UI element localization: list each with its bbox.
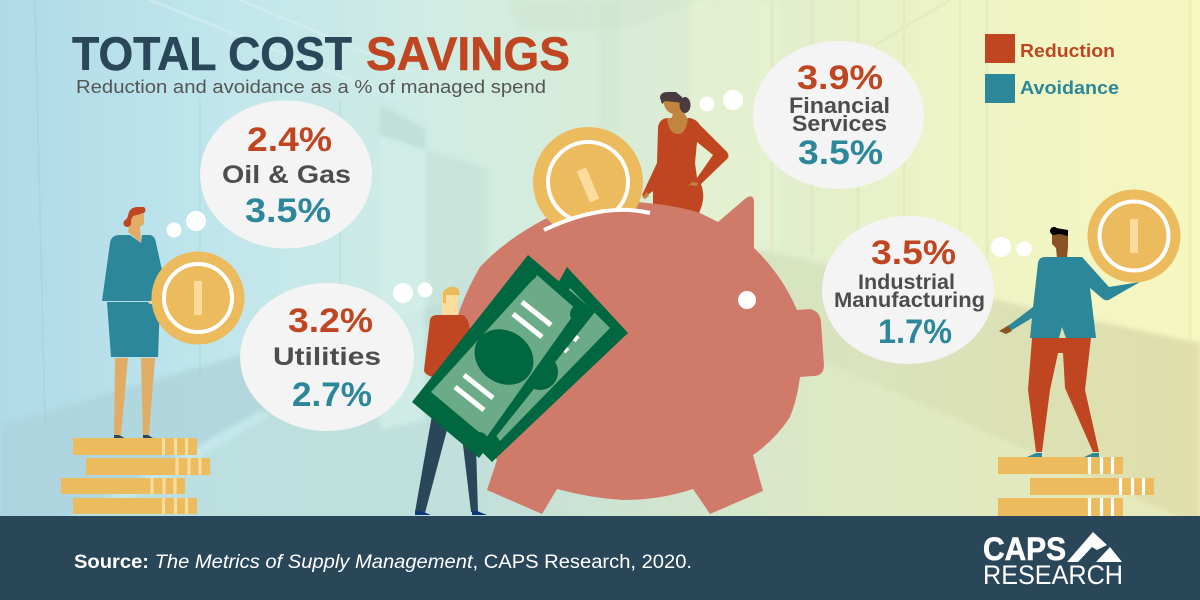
figure: man carrying the bill [415, 287, 487, 515]
figure: woman in red dress [642, 92, 728, 216]
coin held by woman [152, 252, 244, 344]
bubble: Financial Services: 3.9% [797, 59, 883, 97]
piggy bank coin slot [544, 210, 650, 230]
bubble: Utilities: 2.7% [292, 376, 372, 414]
bubble: Industrial Manufacturing: 3.5% [871, 234, 956, 272]
thought dots: woman in teal [166, 211, 206, 238]
coin held by man [1088, 190, 1180, 282]
bubble: Oil & Gas: 3.5% [245, 192, 331, 230]
bubble: Oil & Gas: Oil & Gas [222, 161, 351, 189]
legend [985, 34, 1119, 103]
bubble: Financial Services [753, 41, 924, 189]
logo: CAPS Research [983, 531, 1123, 590]
bubble: Utilities: 3.2% [288, 302, 373, 340]
bubble: Industrial Manufacturing [822, 216, 994, 364]
bubble: Industrial Manufacturing: 1.7% [878, 313, 952, 351]
bubble: Financial Services: Services [792, 111, 887, 136]
thought dots: man [393, 282, 432, 303]
figure: woman in teal [102, 207, 162, 441]
bubble: Oil & Gas: 2.4% [247, 121, 332, 159]
logo: CAPS Research: RESEARCH [983, 560, 1123, 590]
dollar bills [412, 255, 628, 462]
subtitle: Reduction and avoidance as a % of managed spend [76, 76, 546, 97]
bubble: Financial Services: 3.5% [798, 134, 883, 172]
coin entering the piggy bank [533, 127, 643, 224]
piggy bank [452, 196, 824, 514]
title: SAVINGS [366, 27, 570, 80]
logo: CAPS Research: CAPS [983, 531, 1066, 567]
title [72, 27, 570, 80]
bubble: Utilities [240, 283, 414, 431]
bubble: Utilities: Utilities [273, 343, 381, 371]
figure: man in teal [999, 227, 1140, 457]
bubble: Oil & Gas [200, 100, 372, 248]
legend: Reduction [1020, 41, 1115, 61]
title: TOTAL COST [72, 27, 352, 80]
thought dots: woman in red [700, 90, 743, 112]
bubble: Industrial Manufacturing: Industrial [858, 271, 955, 294]
thought dots: man in teal [991, 237, 1032, 257]
footer band [0, 516, 1200, 600]
bubble: Industrial Manufacturing: Manufacturing [834, 289, 985, 312]
legend: Avoidance [1020, 78, 1119, 98]
coin stack right [998, 457, 1154, 516]
bubble: Financial Services: Financial [789, 93, 890, 118]
coin stack left [61, 438, 210, 514]
source line: Source: The Metrics of Supply Management , CAPS Research, 2020. [74, 552, 692, 573]
